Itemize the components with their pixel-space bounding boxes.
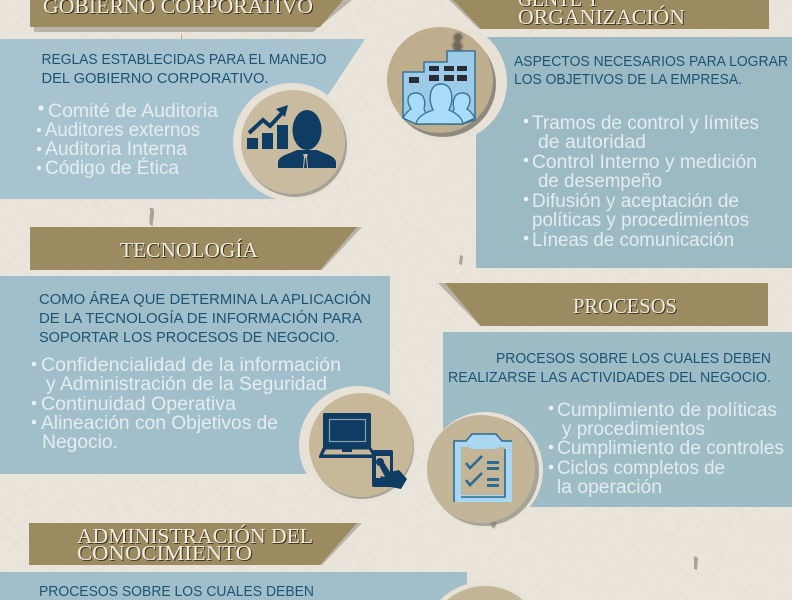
banner: tecnología: TECNOLOGÍA xyxy=(120,238,259,262)
intro text: COMO ÁREA QUE DETERMINA LA APLICACIÓN xyxy=(39,291,371,308)
bullet list: Continuidad Operativa xyxy=(41,394,236,415)
intro text: REALIZARSE LAS ACTIVIDADES DEL NEGOCIO. xyxy=(448,369,771,386)
banner: gente y organización xyxy=(449,0,769,29)
bullet list: la operación xyxy=(557,477,662,498)
banner: gente y organización: ORGANIZACIÓN xyxy=(518,5,685,29)
bullet list: Confidencialidad de la información xyxy=(41,355,341,376)
panel: procesos xyxy=(443,332,792,507)
intro text xyxy=(39,291,371,346)
bullet list: Negocio. xyxy=(42,432,118,453)
panel: gente y organización xyxy=(476,37,792,268)
bullet list: Alineación con Objetivos de xyxy=(41,413,278,434)
bullet list: Comité de Auditoria xyxy=(48,101,218,122)
banner: procesos: PROCESOS xyxy=(573,294,677,318)
bullet list xyxy=(37,101,218,179)
intro text: DEL GOBIERNO CORPORATIVO. xyxy=(42,70,268,87)
intro text xyxy=(514,53,788,88)
banner: administración del conocimiento: CONOCIMIENTO xyxy=(77,541,252,565)
bullet list: Auditores externos xyxy=(45,120,200,141)
panel: administración del conocimiento xyxy=(0,572,467,600)
panel: gobierno corporativo xyxy=(0,39,365,199)
bullet list: Ciclos completos de xyxy=(557,458,725,479)
bullet list: Tramos de control y límites xyxy=(532,113,759,134)
intro text: SOPORTAR LOS PROCESOS DE NEGOCIO. xyxy=(39,329,339,346)
banner: administración del conocimiento: ADMINISTRACIÓN DEL xyxy=(77,524,313,548)
bullet list: Cumplimiento de políticas xyxy=(557,400,777,421)
bullet list: Control Interno y medición xyxy=(532,152,757,173)
bullet list: Auditoria Interna xyxy=(45,139,187,160)
bullet list xyxy=(524,113,759,251)
intro text: REGLAS ESTABLECIDAS PARA EL MANEJO xyxy=(42,51,326,68)
bullet list xyxy=(549,400,784,498)
panel: administración del conocimiento: PROCESOS SOBRE LOS CUALES DEBEN xyxy=(39,583,314,600)
bullet list: Cumplimiento de controles xyxy=(557,438,784,459)
icon: bottom circle xyxy=(440,582,530,600)
intro text: DE LA TECNOLOGÍA DE INFORMACIÓN PARA xyxy=(39,310,362,327)
bullet list xyxy=(32,355,341,453)
intro text: PROCESOS SOBRE LOS CUALES DEBEN xyxy=(496,350,771,367)
banner: tecnología xyxy=(30,227,362,270)
intro text xyxy=(448,350,771,386)
intro text xyxy=(42,51,326,87)
bullet list: políticas y procedimientos xyxy=(532,210,749,231)
icon: checklist clipboard xyxy=(427,412,543,528)
banner: administración del conocimiento xyxy=(29,523,362,565)
bullet list: y Administración de la Seguridad xyxy=(46,374,327,395)
icon: laptop and tablet xyxy=(299,386,417,504)
icon: factory and people xyxy=(387,22,507,142)
banner: procesos xyxy=(438,283,768,326)
banner: gobierno corporativo xyxy=(30,0,352,32)
bullet list: de autoridad xyxy=(538,132,646,153)
bullet list: Difusión y aceptación de xyxy=(532,191,739,212)
bullet list: Código de Ética xyxy=(45,158,179,179)
icon: executive with growth chart xyxy=(233,83,351,201)
panel: tecnología xyxy=(0,276,390,474)
intro text: LOS OBJETIVOS DE LA EMPRESA. xyxy=(514,71,742,88)
bullet list: y procedimientos xyxy=(562,419,705,440)
bullet list: Líneas de comunicación xyxy=(532,230,734,251)
bullet list: de desempeño xyxy=(538,171,662,192)
